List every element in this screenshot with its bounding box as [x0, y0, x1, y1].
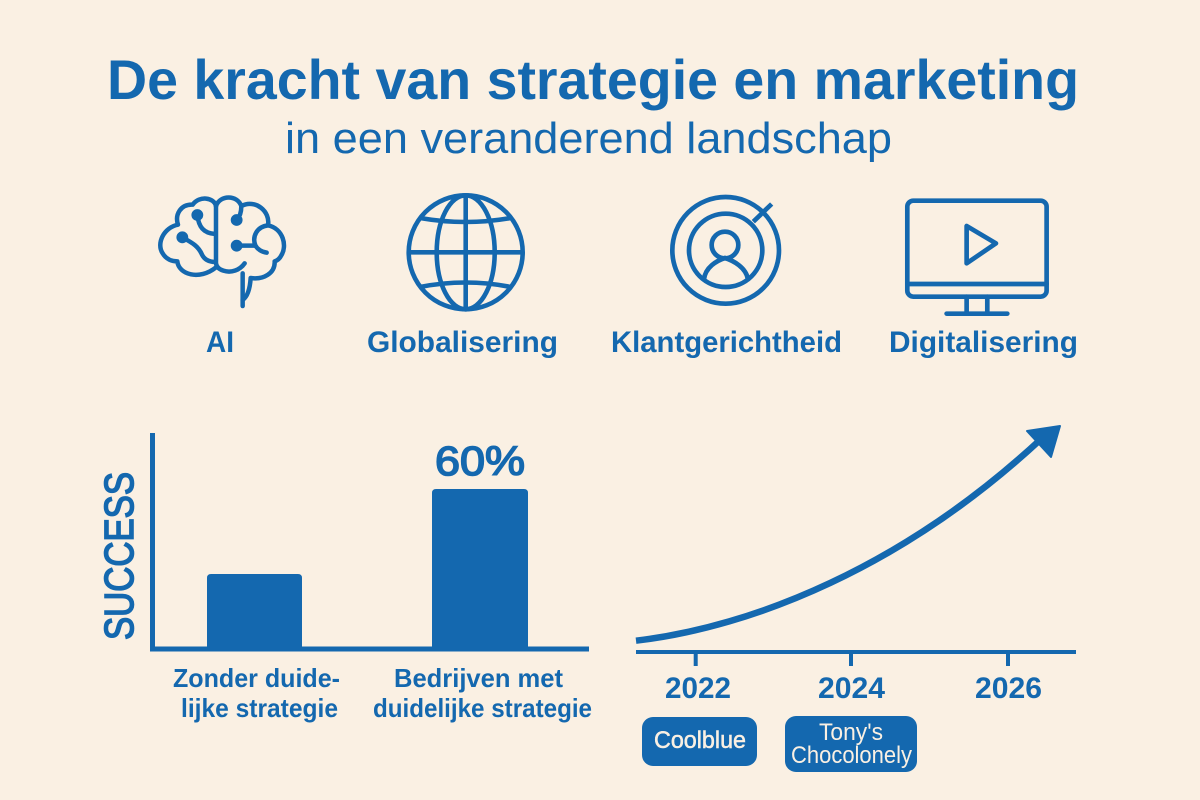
- tag: Coolblue: [642, 717, 757, 766]
- icon: globe: [409, 195, 523, 309]
- tag: Tony's Chocolonely: Chocolonely: [791, 742, 912, 769]
- category label: Zonder duidelijke strategie: lijke strategie: [181, 693, 338, 723]
- bar: without clear strategy: [207, 574, 302, 651]
- timeline axis: [636, 652, 1076, 666]
- subtitle: in een veranderend landschap: [285, 114, 892, 163]
- icon: brain: [160, 197, 284, 306]
- tag: Tony's Chocolonely: [785, 716, 917, 772]
- tag: Coolblue: Coolblue: [654, 727, 746, 754]
- year: 2022: 2022: [665, 672, 731, 705]
- label: AI: AI: [206, 326, 234, 359]
- y axis label: SUCCESS: SUCCESS: [96, 472, 142, 640]
- value: 60%: 60%: [435, 438, 525, 484]
- bar chart axes: [152, 433, 589, 649]
- label: Globalisering: Globalisering: [367, 326, 558, 359]
- title: De kracht van strategie en marketing: [107, 48, 1079, 111]
- icon: customer target: [672, 197, 779, 304]
- category label: Bedrijven met duidelijke strategie: [373, 663, 592, 723]
- growth arrow: [636, 426, 1060, 641]
- category label: Zonder duidelijke strategie: [173, 663, 340, 723]
- category label: Bedrijven met duidelijke strategie: duidelijke strategie: [373, 693, 592, 723]
- icon: monitor with play button: [907, 201, 1047, 314]
- category label: Bedrijven met duidelijke strategie: Bedrijven met: [394, 663, 563, 693]
- year: 2026: 2026: [975, 672, 1042, 705]
- year: 2024: 2024: [818, 672, 885, 705]
- label: Klantgerichtheid: Klantgerichtheid: [611, 326, 842, 359]
- label: Digitalisering: Digitalisering: [889, 326, 1078, 359]
- bar: with clear strategy: [432, 489, 528, 651]
- category label: Zonder duidelijke strategie: Zonder duide-: [173, 663, 340, 693]
- bar chart: [96, 433, 592, 723]
- tag: Tony's Chocolonely: Tony's: [819, 719, 883, 746]
- growth timeline chart: [636, 426, 1076, 772]
